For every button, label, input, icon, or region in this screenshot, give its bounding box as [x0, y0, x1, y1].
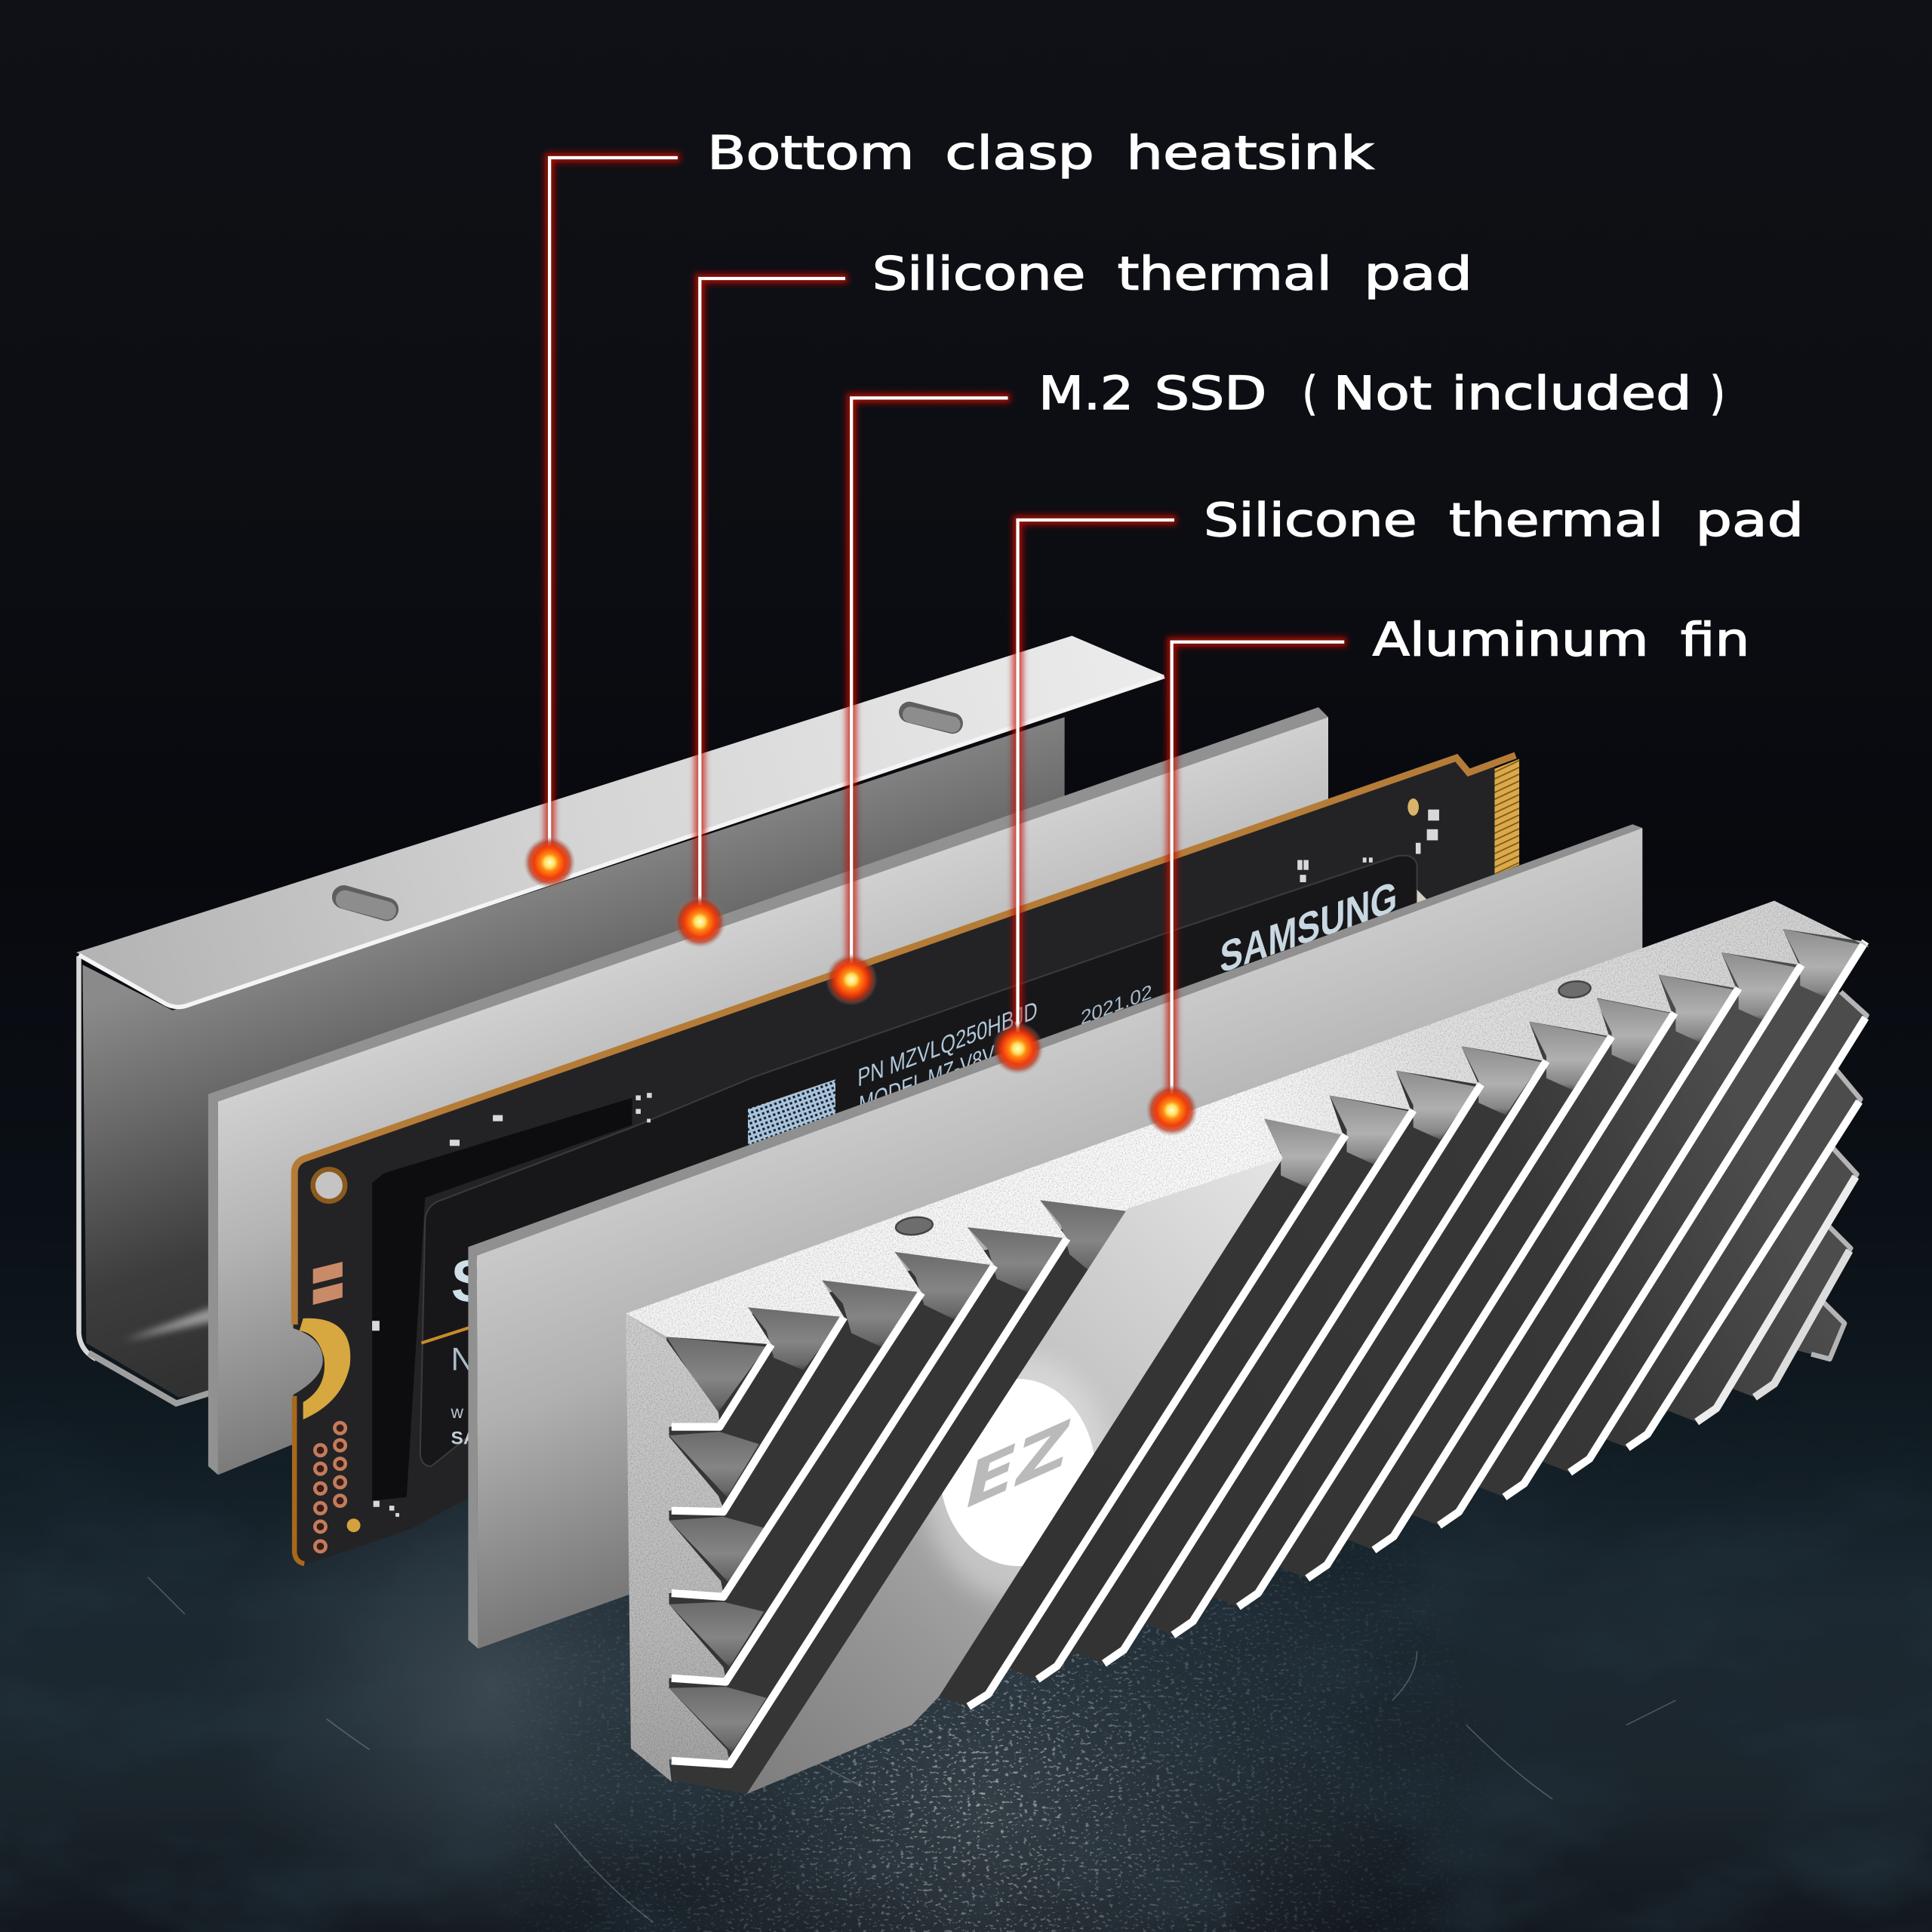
part number text: PN MZVLQ250HBJD [857, 996, 1038, 1093]
label: Silicone [1204, 494, 1417, 547]
front pad face [477, 828, 1642, 1648]
leader line [1018, 520, 1174, 1042]
bottom clasp heatsink [76, 635, 1164, 1404]
label: included [1451, 368, 1692, 420]
left section bright fin edges [672, 1238, 1067, 1764]
right tooth grey rims [1811, 992, 1866, 1359]
front pad edge [468, 824, 1642, 1648]
screw hole left [895, 1216, 934, 1236]
label: Bottom [707, 128, 914, 180]
pad left edge [208, 707, 1328, 1475]
marker dot [1146, 1084, 1198, 1136]
leader line [851, 398, 1008, 974]
clasp top face [76, 635, 1164, 1008]
label: Aluminum [1373, 614, 1648, 667]
label: fin [1681, 614, 1749, 667]
M.2 SSD [294, 755, 1519, 1564]
copper pads [313, 1262, 343, 1284]
mounting hole [313, 1169, 345, 1201]
leader glow [549, 158, 1346, 1104]
heatsink end face [626, 1313, 730, 1782]
aluminum fin heatsink [626, 900, 1869, 1794]
chip label N: N [451, 1342, 474, 1377]
label: clasp [945, 128, 1094, 180]
logo badge [921, 1355, 1114, 1601]
label: pad [1696, 494, 1804, 547]
gold dot [347, 1518, 361, 1532]
logo halo [921, 1355, 1114, 1601]
label: M.2 [1038, 368, 1134, 420]
copper pad lower [313, 1283, 343, 1305]
pad face [218, 717, 1328, 1475]
clasp floor reflection [123, 1306, 216, 1340]
datamatrix code [748, 1079, 835, 1171]
clasp top front highlight [78, 676, 1164, 1007]
callout: aluminum fin [1146, 614, 1749, 1136]
clasp lower lip [89, 1353, 212, 1404]
right section bright fin edges [968, 941, 1866, 1706]
screw hole right [1558, 980, 1592, 999]
callout: bottom clasp heatsink [524, 128, 1374, 888]
gold test point [1407, 798, 1419, 816]
gold connector fingers [1494, 759, 1519, 875]
leader line [1172, 642, 1344, 1104]
label: pad [1364, 248, 1472, 301]
label: Silicone [872, 248, 1085, 301]
clasp inner wall [82, 717, 1065, 1397]
callout: silicone thermal pad front [992, 494, 1804, 1075]
callout: silicone thermal pad rear [674, 248, 1472, 948]
samsung brand: SAMSUNG [1220, 872, 1397, 983]
heatsink top strip [626, 900, 1869, 1344]
sticker notch [1417, 890, 1427, 909]
ssd lower orange edge [294, 1396, 304, 1564]
model text: MODEL MZ-V8V [859, 1040, 995, 1120]
gold half ring [300, 1318, 350, 1420]
date text: 2021.02 [1081, 980, 1152, 1029]
label: Not [1334, 368, 1432, 420]
marker dot [826, 954, 877, 1005]
leader line [549, 158, 678, 857]
label: thermal [1449, 494, 1663, 547]
via dots [315, 1423, 346, 1552]
label: ) [1710, 368, 1725, 420]
chip label orange rule [421, 1322, 487, 1343]
clasp left edge [78, 956, 96, 1359]
label: SSD [1155, 368, 1266, 420]
clasp slot right [909, 712, 952, 724]
logo mark: EZ [966, 1407, 1071, 1522]
ssd orange edge [294, 755, 1515, 1324]
silicone thermal pad front [468, 824, 1642, 1648]
right fin block base [939, 929, 1866, 1706]
chip label SA: SA [451, 1428, 477, 1448]
leader line [700, 278, 845, 915]
chip label area [420, 856, 1417, 1466]
central smooth band [746, 1158, 1283, 1794]
chip label w: w [451, 1402, 464, 1422]
callout: m.2 ssd [826, 368, 1725, 1005]
marker dot [992, 1023, 1044, 1075]
right section grey notches [1263, 929, 1863, 1188]
left fin block base [666, 1211, 1128, 1794]
left section grey notches [666, 1200, 1128, 1752]
silicone thermal pad rear [208, 707, 1328, 1475]
label: thermal [1118, 248, 1332, 301]
chip label S: S [451, 1247, 491, 1314]
label: heatsink [1126, 128, 1374, 180]
board small parts [372, 810, 1439, 1517]
nand chip block [372, 1098, 632, 1501]
marker dot [674, 896, 726, 948]
background [0, 1291, 1932, 1932]
label: ( [1303, 368, 1317, 420]
clasp slot left [344, 897, 387, 911]
marker dot [524, 837, 575, 888]
logo disc [940, 1379, 1095, 1566]
ssd circuit board [294, 756, 1494, 1564]
